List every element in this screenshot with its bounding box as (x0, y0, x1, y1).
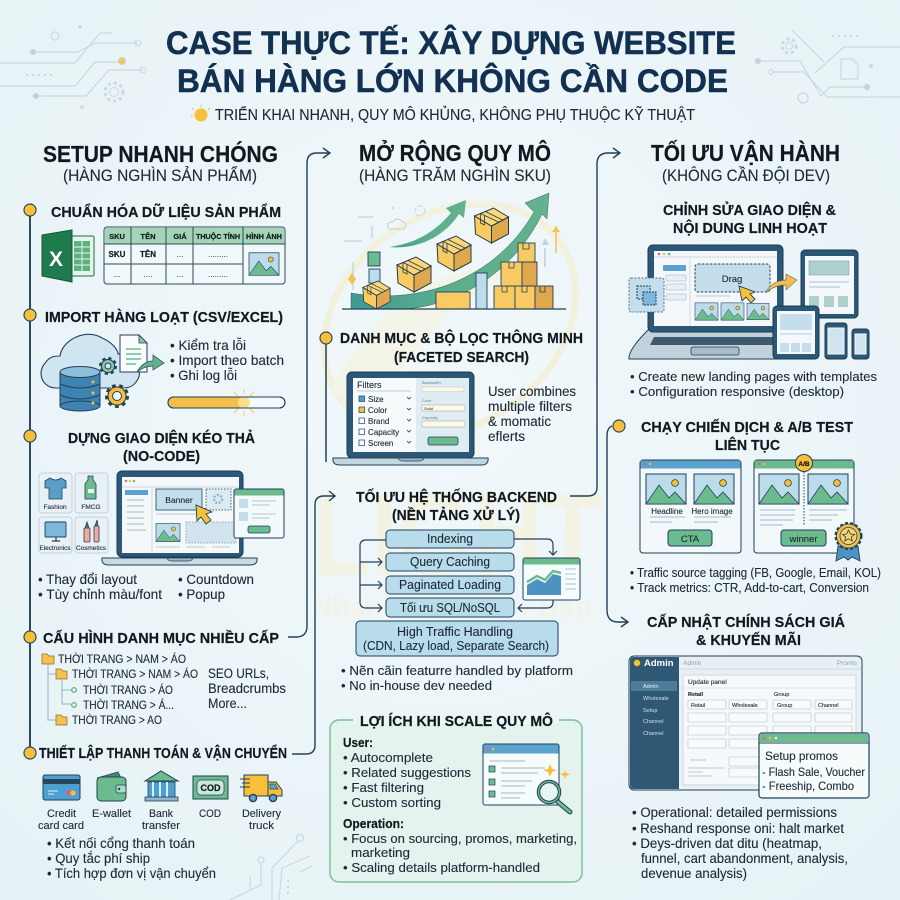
laptop editor: Drag (722, 274, 742, 285)
admin panel: Group (777, 703, 792, 709)
product data table: TÊN (140, 250, 156, 259)
a/b test bullets: • Track metrics: CTR, Add-to-cart, Conversion (630, 580, 869, 595)
setup promos popup: - Flash Sale, Voucher (762, 765, 865, 779)
heading: a/b test with milestone: CHẠY CHIẾN DỊCH & A/B TEST (641, 419, 853, 436)
seo note (208, 666, 286, 711)
box: sql (386, 598, 514, 617)
heading: backend: (NỀN TẢNG XỬ LÝ) (392, 506, 520, 524)
large arrow (351, 193, 549, 309)
import bullets: • Kiểm tra lỗi (170, 337, 246, 353)
faint background icons (344, 206, 560, 290)
column 2: scale (320, 138, 583, 882)
laptop: filters panel: Screen (368, 439, 393, 448)
a/b test bullets (630, 565, 881, 595)
box: high traffic: High Traffic Handling (397, 625, 513, 639)
heading: kéo thả: DỰNG GIAO DIỆN KÉO THẢ (68, 429, 255, 447)
heading: backend (356, 488, 557, 524)
icon: cod banknote: COD (200, 783, 221, 793)
heading: chỉnh sửa (663, 201, 836, 237)
heading: giá và khuyến mãi (647, 613, 845, 649)
product data table: ... (114, 270, 120, 279)
icon: credit card (43, 775, 80, 800)
category tree: THỜI TRANG > ÁO (83, 682, 173, 697)
category tiles: Electronics (40, 545, 71, 552)
import bullets (170, 337, 284, 383)
admin panel: Admin (683, 660, 702, 667)
a/b badge: A/B (798, 461, 810, 468)
filter note: User combines (488, 384, 576, 399)
large tablet (801, 250, 858, 318)
admin panel: Promis (837, 660, 858, 667)
admin panel: Retail (688, 692, 703, 698)
payment labels: Delivery (242, 808, 281, 820)
dashed layer tile (629, 278, 664, 312)
product data table: GIÁ (173, 232, 187, 241)
column 3 heading: (KHÔNG CẦN ĐỘI DEV) (662, 166, 830, 185)
category tree: THỜI TRANG > NAM > ÁO (72, 666, 198, 681)
operations bullets (632, 805, 848, 881)
editing bullets: • Create new landing pages with templates (630, 369, 877, 384)
phones (825, 323, 869, 359)
box: indexing: Indexing (427, 531, 473, 546)
admin panel: Update panel (688, 679, 727, 686)
variant b window (754, 460, 854, 553)
import bullets: • Import theo batch (170, 352, 284, 368)
backend bullets (341, 663, 573, 693)
small tablet (773, 306, 819, 359)
operations bullets: funnel, cart abandonment, analysis, (641, 851, 848, 866)
operation benefits: Operation: (343, 816, 404, 831)
builder bullets: • Countdown (178, 571, 254, 587)
icon: winner medal (836, 524, 861, 561)
category tiles: Fashion (43, 504, 67, 511)
column 3 heading: TỐI ƯU VẬN HÀNH (651, 139, 840, 166)
orange arrow (766, 274, 797, 292)
seo note: SEO URLs, (208, 666, 269, 681)
seo note: More... (208, 696, 247, 711)
panel: scale benefits (330, 712, 582, 882)
payment labels (38, 808, 281, 832)
category tiles (39, 473, 108, 553)
operations bullets: • Reshand response oni: halt market (632, 821, 844, 836)
laptop: filters panel: Capacity (422, 415, 438, 420)
column 3: operations (613, 139, 881, 881)
heading: giá và khuyến mãi: CẤP NHẬT CHÍNH SÁCH GIÁ (647, 613, 845, 631)
builder bullets: • Popup (178, 586, 225, 602)
icon: e-wallet (97, 772, 126, 801)
watermark logo (279, 157, 621, 624)
box: high traffic: (CDN, Lazy load, Separate Search) (363, 639, 549, 653)
product data table: TÊN (140, 232, 156, 241)
user benefits: • Fast filtering (343, 780, 424, 795)
user benefits: • Autocomplete (343, 750, 433, 765)
admin panel: Group (774, 692, 789, 698)
operation benefits: marketing (351, 845, 410, 860)
box: query caching: Query Caching (410, 554, 490, 569)
admin panel: Wholesale (643, 696, 669, 702)
builder bullets: • Tùy chỉnh màu/font (38, 586, 162, 602)
benefits heading: LỢI ÍCH KHI SCALE QUY MÔ (360, 712, 553, 730)
editing bullets: • Configuration responsive (desktop) (630, 384, 844, 399)
category tiles: Cosmetics (76, 545, 107, 552)
payment labels: Bank (149, 808, 173, 820)
category tree: THỜI TRANG > AO (72, 712, 162, 727)
variant b window: winner (788, 534, 818, 545)
heading: chỉnh sửa: CHỈNH SỬA GIAO DIỆN & (663, 201, 836, 219)
product data table (104, 227, 285, 284)
column 1 heading (43, 140, 278, 185)
heading: bộ lọc with milestone (320, 329, 583, 462)
column 3 heading (651, 139, 840, 185)
user benefits (343, 735, 472, 810)
stacked blocks and boxes (363, 208, 553, 309)
icon: cod banknote (193, 776, 228, 799)
import bullets: • Ghi log lỗi (170, 367, 237, 383)
box: paginated loading: Paginated Loading (399, 577, 501, 592)
product data table: ... (177, 250, 183, 259)
watermark logo: LIGHT (312, 469, 602, 601)
admin panel: Setup (643, 708, 657, 714)
heading: danh mục: CẤU HÌNH DANH MỤC NHIỀU CẤP (43, 630, 279, 647)
payment labels: truck (249, 820, 275, 832)
product data table: .... (144, 270, 152, 279)
laptop: filters panel: Capacity (368, 428, 399, 437)
icon: excel (42, 230, 94, 282)
payment labels: Credit (47, 808, 76, 820)
title: CASE THỰC TẾ: XÂY DỰNG WEBSITE (166, 25, 736, 61)
variant a window (640, 460, 741, 553)
heading: import: IMPORT HÀNG LOẠT (CSV/EXCEL) (45, 309, 283, 326)
laptop: filters panel (333, 372, 488, 465)
operations bullets: • Operational: detailed permissions (632, 805, 837, 820)
user benefits: • Related suggestions (343, 765, 472, 780)
admin panel (629, 656, 862, 790)
operations bullets: devenue analysis) (641, 866, 747, 881)
progress bar (168, 389, 285, 416)
title (166, 25, 736, 99)
backend stack flow (356, 530, 580, 656)
payment bullets: • Quy tắc phí ship (47, 850, 150, 866)
admin panel: Channel (643, 731, 664, 737)
admin panel: Admin (643, 684, 659, 690)
heading: chuẩn hóa: CHUẨN HÓA DỮ LIỆU SẢN PHẨM (51, 203, 281, 221)
watermark logo: Nhanh - Chuẩn - Đẹp (312, 591, 592, 624)
category tree (42, 651, 198, 727)
payment bullets: • Tích hợp đơn vị vận chuyển (47, 865, 216, 881)
icon: bank (145, 771, 178, 801)
payment labels: E-wallet (92, 808, 131, 820)
heading: giá và khuyến mãi: & KHUYẾN MÃI (696, 631, 801, 649)
admin panel: Admin (644, 658, 674, 669)
backend bullets: • No in-house dev needed (341, 678, 492, 693)
heading: a/b test with milestone (613, 419, 853, 454)
filter note (488, 384, 576, 444)
payment bullets (47, 835, 216, 881)
laptop: filters panel: Brand (368, 417, 389, 426)
admin panel: Channel (818, 703, 838, 709)
column 2 heading: MỞ RỘNG QUY MÔ (359, 138, 551, 166)
circuit decoration: top left (0, 25, 146, 109)
admin panel: Retail (691, 703, 705, 709)
setup promos popup (759, 733, 869, 798)
laptop: filters panel: Color (422, 398, 432, 403)
box: indexing (386, 530, 514, 548)
product data table: THUỘC TÍNH (196, 232, 240, 241)
heading: kéo thả (68, 429, 255, 465)
user benefits: • Custom sorting (343, 795, 441, 810)
product data table: ......... (208, 250, 228, 259)
circuit decoration: bottom (230, 834, 312, 900)
payment labels: card card (38, 820, 84, 832)
heading: bộ lọc with milestone: DANH MỤC & BỘ LỌC THÔNG MINH (340, 329, 583, 347)
icon: excel: X (49, 248, 63, 271)
column 2 heading: (HÀNG TRĂM NGHÌN SKU) (359, 166, 551, 185)
laptop: filters panel: Bandwidth (422, 380, 441, 385)
box: sql: Tối ưu SQL/NoSQL (400, 600, 500, 615)
operation benefits: • Focus on sourcing, promos, marketing, (343, 831, 577, 846)
a/b badge (796, 454, 812, 472)
admin panel: Channel (643, 719, 664, 725)
admin panel: Wholesale (732, 703, 758, 709)
small arrow (389, 200, 466, 247)
product data table: HÌNH ẢNH (246, 232, 282, 241)
subtitle with sun icon: TRIỂN KHAI NHANH, QUY MÔ KHỦNG, KHÔNG PHỤ THUỘC KỸ THUẬT (215, 106, 695, 124)
product data table: ......... (208, 270, 228, 279)
variant a window: Headline (651, 507, 683, 516)
payment bullets: • Kết nối cổng thanh toán (47, 835, 195, 851)
category tree: THỜI TRANG > NAM > ÁO (58, 651, 186, 666)
laptop editor (629, 245, 795, 359)
connector arrows between columns (288, 148, 628, 754)
builder bullets (38, 571, 254, 602)
product data table: ... (177, 270, 183, 279)
operation benefits: • Scaling details platform-handled (343, 860, 540, 875)
laptop: drag and drop builder (102, 471, 284, 565)
growth chart with boxes (342, 193, 566, 309)
heading: backend: TỐI ƯU HỆ THỐNG BACKEND (356, 488, 557, 506)
laptop: filters panel: Color (368, 406, 387, 415)
chart window (523, 558, 580, 600)
category tree: THỜI TRANG > Á... (83, 697, 174, 712)
timeline with milestone dots (24, 204, 36, 759)
circuit decoration: top right (755, 30, 900, 103)
setup promos popup: Setup promos (765, 749, 838, 763)
column 1 heading: SETUP NHANH CHÓNG (43, 140, 278, 167)
column 1: setup (24, 140, 287, 881)
heading: kéo thả: (NO-CODE) (123, 449, 200, 465)
variant a window: CTA (681, 534, 700, 545)
box: high traffic (356, 621, 558, 656)
editing bullets (630, 369, 877, 399)
column 2 heading (359, 138, 551, 185)
heading: a/b test with milestone: LIÊN TỤC (715, 436, 780, 454)
title: BÁN HÀNG LỚN KHÔNG CẦN CODE (177, 63, 728, 99)
icon: search results window (483, 744, 570, 812)
category tiles: FMCG (81, 504, 101, 511)
product data table: SKU (109, 250, 126, 259)
setup promos popup: - Freeship, Combo (762, 779, 854, 793)
seo note: Breadcrumbs (208, 681, 286, 696)
heading: bộ lọc with milestone: (FACETED SEARCH) (394, 350, 529, 366)
icon: delivery truck (240, 775, 282, 802)
column 1 heading: (HÀNG NGHÌN SẢN PHẨM) (63, 166, 257, 185)
operations bullets: • Deys-driven dat ditu (heatmap, (632, 836, 822, 851)
filter note: eflerts (488, 429, 525, 444)
icon: cloud database import (41, 334, 164, 411)
laptop: filters panel: Filters (357, 380, 382, 390)
builder bullets: • Thay đổi layout (38, 571, 137, 587)
variant a window: Hero image (691, 507, 733, 516)
responsive devices illustration (629, 245, 869, 359)
payment and shipping icons (43, 771, 282, 802)
heading: chỉnh sửa: NỘI DUNG LINH HOẠT (673, 219, 827, 237)
laptop: filters panel: Solid (424, 406, 433, 411)
payment labels: transfer (142, 820, 180, 832)
product data table: SKU (109, 232, 125, 241)
heading: thanh toán: THIẾT LẬP THANH TOÁN & VẬN CHUYỂN (39, 744, 287, 762)
user benefits: User: (343, 735, 373, 750)
payment labels: COD (199, 808, 221, 820)
backend bullets: • Nẽn cãin featurre handled by platform (341, 663, 573, 678)
box: query caching (386, 553, 514, 571)
laptop: drag and drop builder: Banner (165, 495, 193, 505)
laptop: filters panel: Size (368, 395, 384, 404)
filter note: multiple filters (488, 399, 572, 414)
filter note: & momatic (488, 414, 551, 429)
operation benefits (343, 816, 577, 875)
